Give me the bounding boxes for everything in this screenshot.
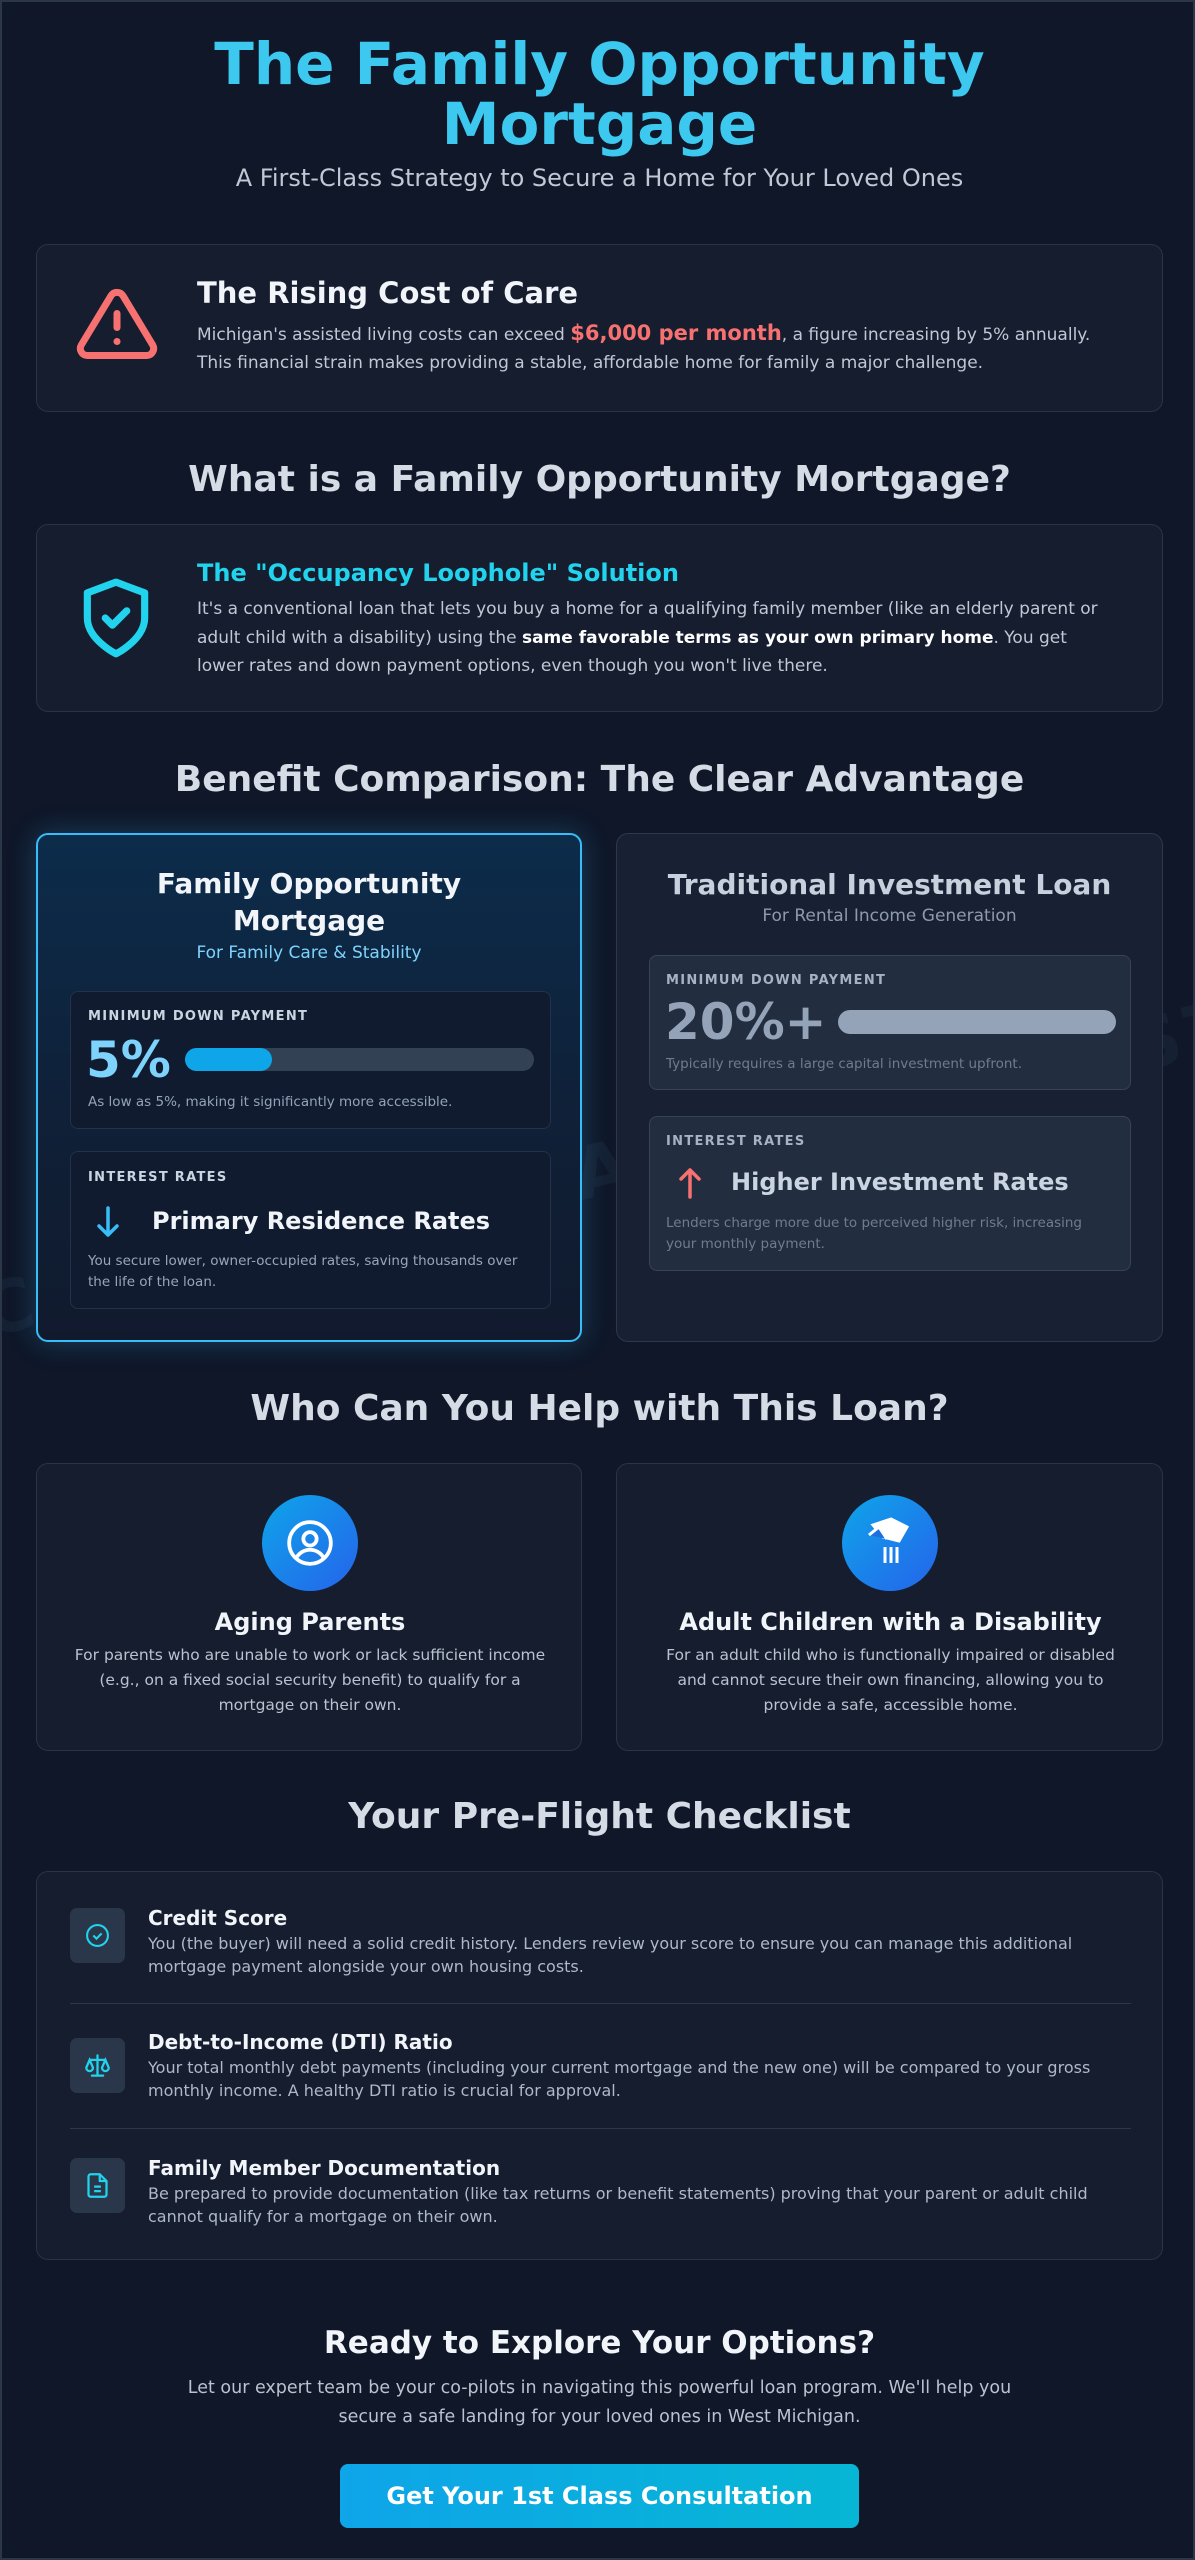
panel: traditional investment loan (616, 833, 1163, 1342)
panel: adult children (616, 1463, 1163, 1751)
icon: shield check (84, 578, 148, 658)
panel: checklist (36, 1871, 1163, 2260)
panel: occupancy loophole (36, 524, 1163, 712)
box: interest rates (70, 1151, 551, 1309)
box: interest rates: Higher Investment Rates (731, 1168, 1069, 1196)
item: documentation: Be prepared to provide documentation (like tax returns or benefit statements) proving that your parent or adult child cannot qualify for a mortgage on their own. (148, 2184, 1088, 2226)
icon: warning triangle (76, 288, 158, 359)
text: It's a conventional loan that lets you buy a home for a qualifying family member (like an elderly parent or adult child with a disability) using the same favorable terms as your own primary home. You get lower rates and down payment options, even though you won't live there. (197, 599, 1098, 676)
box: interest rates: Primary Residence Rates (152, 1207, 490, 1235)
box: interest rates: INTEREST RATES (88, 1170, 228, 1185)
title: The Family Opportunity (214, 30, 985, 98)
item: DTI: Your total monthly debt payments (including your current mortgage and the new one) will be compared to your gross monthly income. A healthy DTI ratio is crucial for approval. (148, 2058, 1090, 2100)
box: interest rates (649, 1116, 1131, 1271)
icon: down arrow (97, 1206, 119, 1237)
panel: adult children: Adult Children with a Disability (679, 1608, 1102, 1636)
subtitle: A First-Class Strategy to Secure a Home for Your Loved Ones (236, 164, 963, 192)
box: down payment: Typically requires a large capital investment upfront. (666, 1056, 1022, 1072)
card title: Family Opportunity (157, 867, 461, 900)
box: down payment (70, 991, 551, 1129)
title: Mortgage (442, 90, 757, 158)
heading: benefit comparison: Benefit Comparison: The Clear Advantage (175, 759, 1024, 800)
heading: who can you help: Who Can You Help with This Loan? (250, 1388, 949, 1429)
item: DTI (70, 2030, 1090, 2100)
icon: document (70, 2158, 125, 2213)
bar (185, 1048, 534, 1071)
card subtitle: For Rental Income Generation (762, 906, 1017, 926)
panel: aging parents (36, 1463, 582, 1751)
item: DTI: Debt-to-Income (DTI) Ratio (148, 2030, 453, 2054)
item: documentation (70, 2156, 1088, 2226)
item: credit score: Credit Score (148, 1906, 287, 1930)
box: interest rates: INTEREST RATES (666, 1134, 806, 1149)
title (214, 30, 985, 158)
box: interest rates: You secure lower, owner-occupied rates, saving thousands over the life of the loan. (88, 1253, 517, 1290)
panel: aging parents: Aging Parents (215, 1608, 405, 1636)
panel: adult children: For an adult child who is functionally impaired or disabled and cannot secure their own financing, allowing you to provide a safe, accessible home. (666, 1646, 1115, 1714)
card title (157, 867, 461, 937)
heading: what is: What is a Family Opportunity Mortgage? (188, 459, 1011, 500)
item: credit score: You (the buyer) will need a solid credit history. Lenders review your score to ensure you can manage this additional mortgage payment alongside your own housing costs. (148, 1934, 1072, 1976)
stat 5%: 5% (86, 1031, 171, 1089)
icon: up arrow (679, 1168, 701, 1199)
CTA button: Get Your 1st Class Consultation (386, 2482, 813, 2510)
panel: aging parents: For parents who are unable to work or lack sufficient income (e.g., on a fixed social security benefit) to qualify for a mortgage on their own. (75, 1646, 545, 1714)
icon: scale (70, 2038, 125, 2093)
card title: Mortgage (233, 904, 385, 937)
item: credit score (70, 1906, 1072, 1976)
bar (838, 1010, 1116, 1034)
card title: Traditional Investment Loan (668, 868, 1111, 901)
item: documentation: Family Member Documentation (148, 2156, 500, 2180)
card subtitle: For Family Care & Stability (196, 943, 422, 963)
box: down payment: MINIMUM DOWN PAYMENT (666, 973, 886, 988)
panel: rising cost of care (36, 244, 1163, 412)
text: Michigan's assisted living costs can exceed $6,000 per month, a figure increasing by 5% annually. This financial strain makes providing a stable, affordable home for family a major challenge. (197, 321, 1090, 373)
box: down payment: As low as 5%, making it significantly more accessible. (88, 1094, 452, 1110)
stat 20%+: 20%+ (665, 993, 827, 1051)
heading: checklist: Your Pre-Flight Checklist (348, 1796, 851, 1837)
icon: check circle (70, 1908, 125, 1963)
icon: disability (842, 1495, 938, 1591)
CTA button (340, 2464, 859, 2528)
panel: family opportunity mortgage comparison (36, 833, 582, 1342)
CTA heading: Ready to Explore Your Options? (324, 2325, 875, 2361)
icon: user circle (262, 1495, 358, 1591)
box: down payment (649, 955, 1131, 1090)
CTA text: Let our expert team be your co-pilots in navigating this powerful loan program. We'll help you secure a safe landing for your loved ones in West Michigan. (188, 2378, 1011, 2427)
box: interest rates: Lenders charge more due to perceived higher risk, increasing your monthly payment. (666, 1215, 1082, 1252)
heading: The "Occupancy Loophole" Solution (197, 559, 679, 587)
box: down payment: MINIMUM DOWN PAYMENT (88, 1009, 308, 1024)
heading: The Rising Cost of Care (197, 276, 578, 310)
